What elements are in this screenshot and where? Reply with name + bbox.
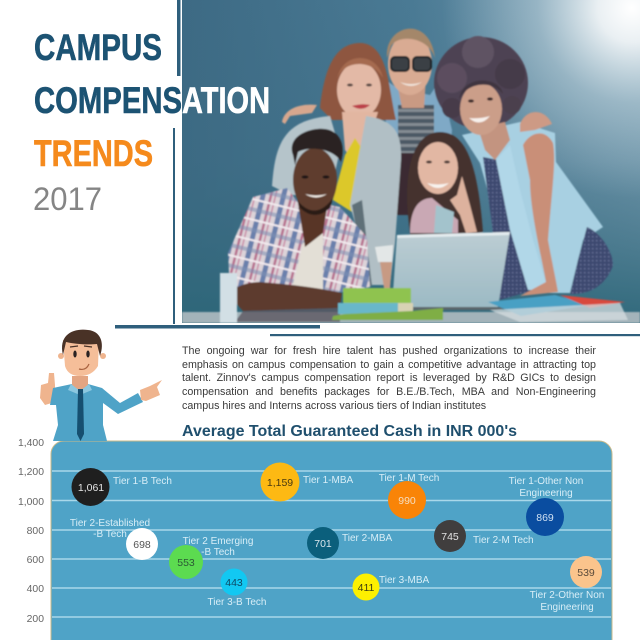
bubble: Tier 2-MBA xyxy=(307,527,393,559)
bubble: Tier 3-B Tech xyxy=(208,568,266,608)
bubble: Tier 2 Emerging B Tech xyxy=(169,536,253,579)
bubble: Tier 2-Established B Tech xyxy=(70,518,158,560)
y axis labels: 1,200 xyxy=(18,467,44,478)
chart panel xyxy=(18,438,612,640)
bubble: Tier 1-M Tech: 990 xyxy=(398,495,416,507)
bubble: Tier 1-Other Non Engineering: Engineering xyxy=(519,488,573,499)
y axis labels: 600 xyxy=(27,555,44,566)
bubble: Tier 2 Emerging B Tech: 553 xyxy=(177,557,195,569)
bubble: Tier 1-Other Non Engineering: 869 xyxy=(536,512,554,524)
bubble: Tier 2 Emerging B Tech: -B Tech xyxy=(201,547,235,558)
bubble: Tier 1-B Tech: 1,061 xyxy=(78,482,104,494)
intro text block xyxy=(182,345,596,412)
bubble: Tier 3-MBA: 411 xyxy=(358,582,375,594)
bubble: Tier 2-Other Non Engineering: 539 xyxy=(577,567,595,579)
bubble: Tier 2-M Tech xyxy=(434,520,534,552)
bubble: Tier 2 Emerging B Tech: Tier 2 Emerging xyxy=(183,536,253,547)
bubble: Tier 3-MBA: Tier 3-MBA xyxy=(379,575,430,586)
thumbs-up hand xyxy=(40,373,55,405)
bubble: Tier 2-MBA: Tier 2-MBA xyxy=(342,533,393,544)
y axis labels: 800 xyxy=(27,526,44,537)
bubble: Tier 3-MBA xyxy=(352,574,430,600)
papers xyxy=(488,295,628,322)
person: man with glasses xyxy=(383,29,452,215)
bubble: Tier 1-Other Non Engineering: Tier 1-Other Non xyxy=(509,476,583,487)
title line: CAMPUS: CAMPUS xyxy=(34,27,162,68)
intro text block: talent. Zinnov's campus compensation report is leveraged by R&D GICs to design xyxy=(182,372,596,384)
person: man in plaid shirt xyxy=(220,129,370,323)
bubble: Tier 2-Established B Tech: -B Tech xyxy=(93,529,127,540)
y axis labels: 400 xyxy=(27,584,44,595)
y axis labels xyxy=(18,438,44,625)
y axis labels: 200 xyxy=(27,614,44,625)
books xyxy=(332,288,443,320)
title line: 2017: 2017 xyxy=(33,181,102,217)
bubble: Tier 1-Other Non Engineering xyxy=(509,476,583,536)
intro text block: campus hires and Interns across various tiers of Indian institutes xyxy=(182,400,486,412)
y axis labels: 1,000 xyxy=(18,497,44,508)
person: woman with curly hair and denim vest xyxy=(434,36,613,300)
laptop xyxy=(390,232,510,310)
bubble: Tier 1-B Tech: Tier 1-B Tech xyxy=(113,476,172,487)
bubble: Tier 2-Other Non Engineering: Tier 2-Other Non xyxy=(530,590,604,601)
bubble: Tier 1-B Tech xyxy=(72,468,172,506)
y axis labels: 1,400 xyxy=(18,438,44,449)
bubble: Tier 2-Other Non Engineering xyxy=(530,556,604,613)
bubble: Tier 1-MBA xyxy=(260,462,354,502)
heading: chart title: Average Total Guaranteed Cash in INR 000's xyxy=(182,423,517,440)
bubble: Tier 2-Other Non Engineering: Engineering xyxy=(540,602,594,613)
bubble: Tier 1-M Tech: Tier 1-M Tech xyxy=(379,473,439,484)
bubble: Tier 2-M Tech: Tier 2-M Tech xyxy=(473,535,534,546)
person: woman seated with dark hair xyxy=(407,132,483,235)
bubble: Tier 1-MBA: Tier 1-MBA xyxy=(303,475,354,486)
bubble: Tier 1-MBA: 1,159 xyxy=(267,477,293,489)
intro text block: emphasis on campus compensation to gain a competitive advantage in attracting top xyxy=(182,359,596,371)
photo: students group with laptop xyxy=(182,0,640,323)
intro text block: compensation and benefits packages for B.E./B.Tech, MBA and Non-Engineering xyxy=(182,386,596,398)
yellow top xyxy=(333,138,363,212)
bubble: Tier 2-Established B Tech: 698 xyxy=(133,539,151,551)
bubble: Tier 3-B Tech: Tier 3-B Tech xyxy=(208,597,266,608)
icon: cartoon businessman pointing xyxy=(40,330,162,441)
person: woman with red hair and grey blazer xyxy=(272,43,401,288)
title xyxy=(33,27,270,217)
title line: COMPENSATION: COMPENS xyxy=(34,80,182,121)
bubble: Tier 1-M Tech xyxy=(379,473,439,519)
bubble: Tier 3-B Tech: 443 xyxy=(225,577,243,589)
bubble: Tier 2-M Tech: 745 xyxy=(441,531,459,543)
title line: COMPENSATION: ATION xyxy=(182,80,270,121)
bubble: Tier 2-MBA: 701 xyxy=(314,538,332,550)
decorative frame lines xyxy=(115,0,640,336)
intro text block: The ongoing war for fresh hire talent has pushed organizations to increase their xyxy=(182,345,596,357)
shirt and arm xyxy=(50,384,143,441)
bubble: Tier 2-Established B Tech: Tier 2-Established xyxy=(70,518,150,529)
title line: TRENDS: TRENDS xyxy=(34,133,153,174)
